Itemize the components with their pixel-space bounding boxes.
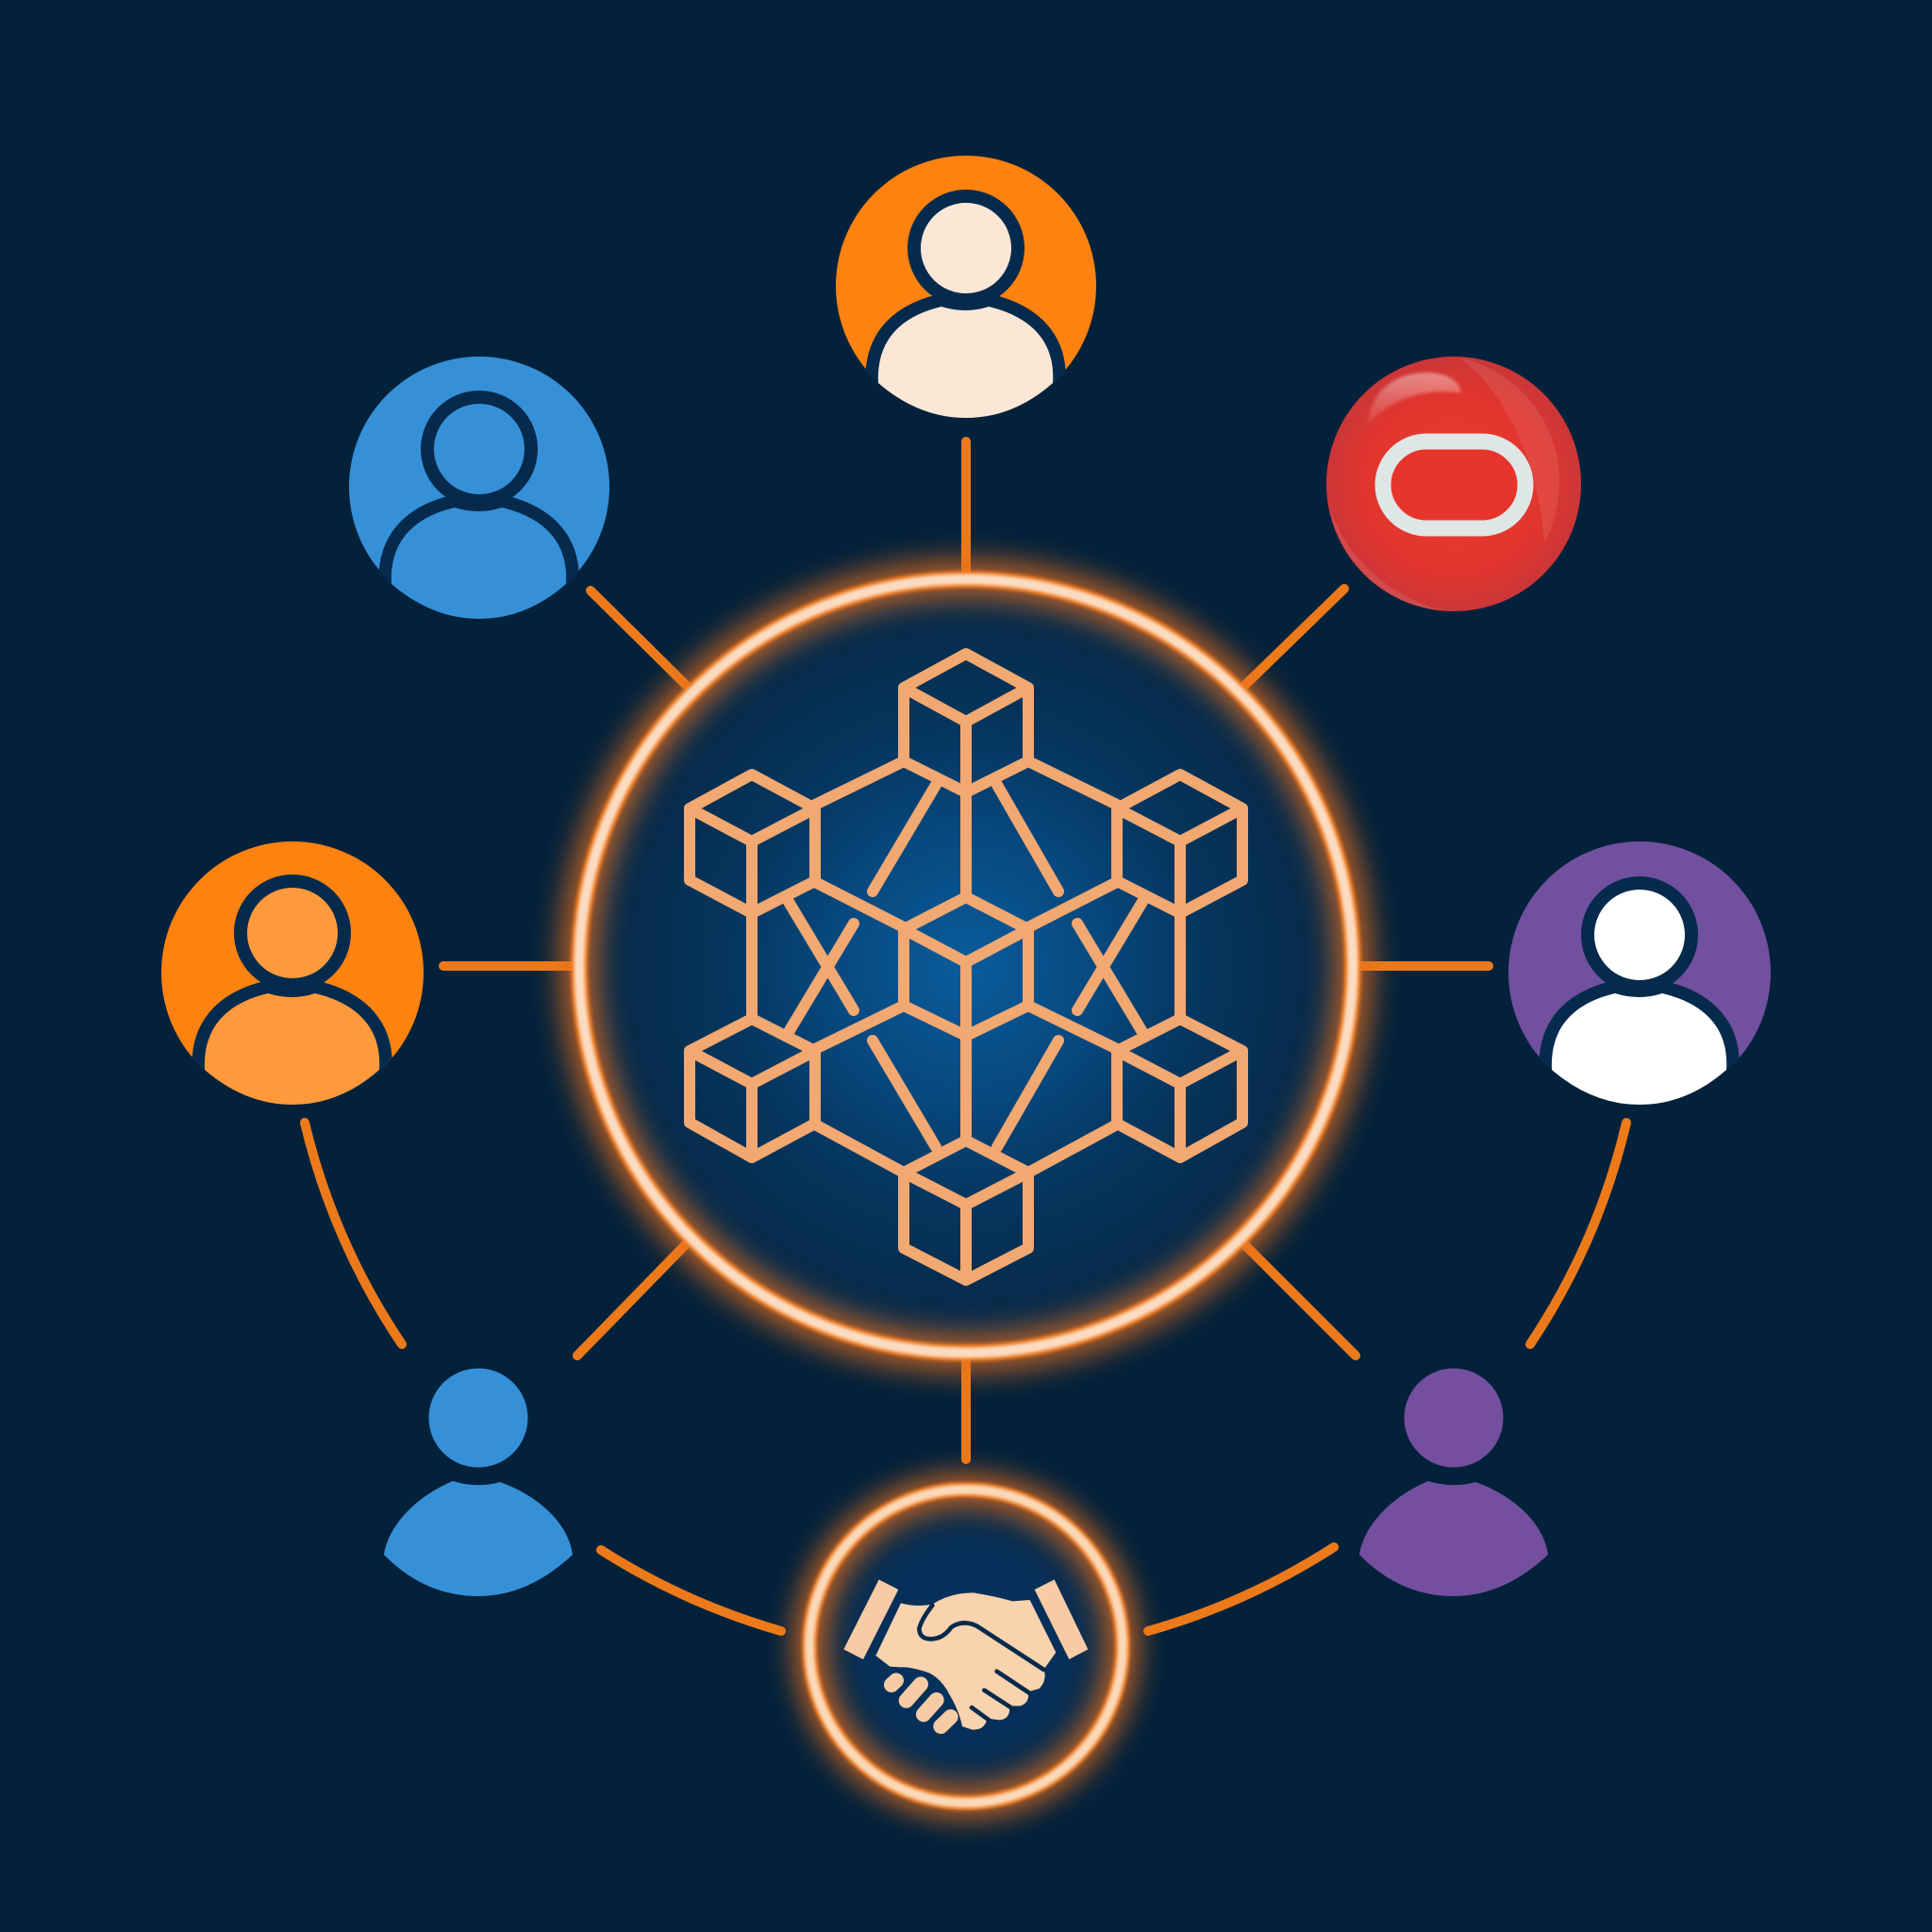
icon: red glossy logo button <box>1326 357 1581 611</box>
handshake ring <box>809 1490 1123 1803</box>
person: blue lower left <box>384 1368 573 1596</box>
avatar: orange left <box>161 841 424 1105</box>
person: purple lower right <box>1359 1368 1548 1596</box>
icon: handshake <box>843 1579 1088 1730</box>
avatar: orange top <box>836 156 1096 418</box>
avatar: purple right <box>1508 841 1771 1105</box>
cube: lower right <box>1117 1019 1242 1158</box>
cuffs <box>843 1579 1088 1659</box>
icon: blockchain cube network <box>690 654 1242 1280</box>
network links <box>752 761 1180 1173</box>
cube: center <box>904 897 1028 1036</box>
clasped hands <box>875 1592 1056 1730</box>
connector lines <box>305 441 1626 1631</box>
cube: upper left <box>690 774 815 913</box>
avatar: blue upper left <box>349 357 609 619</box>
central hub ring <box>578 578 1354 1354</box>
cube: top <box>904 654 1028 792</box>
thumb and finger separators <box>919 1606 1044 1720</box>
fingers of the left hand <box>891 1680 951 1726</box>
cube: bottom <box>904 1141 1028 1280</box>
cube: upper right <box>1117 774 1242 913</box>
cube: lower left <box>690 1019 815 1158</box>
